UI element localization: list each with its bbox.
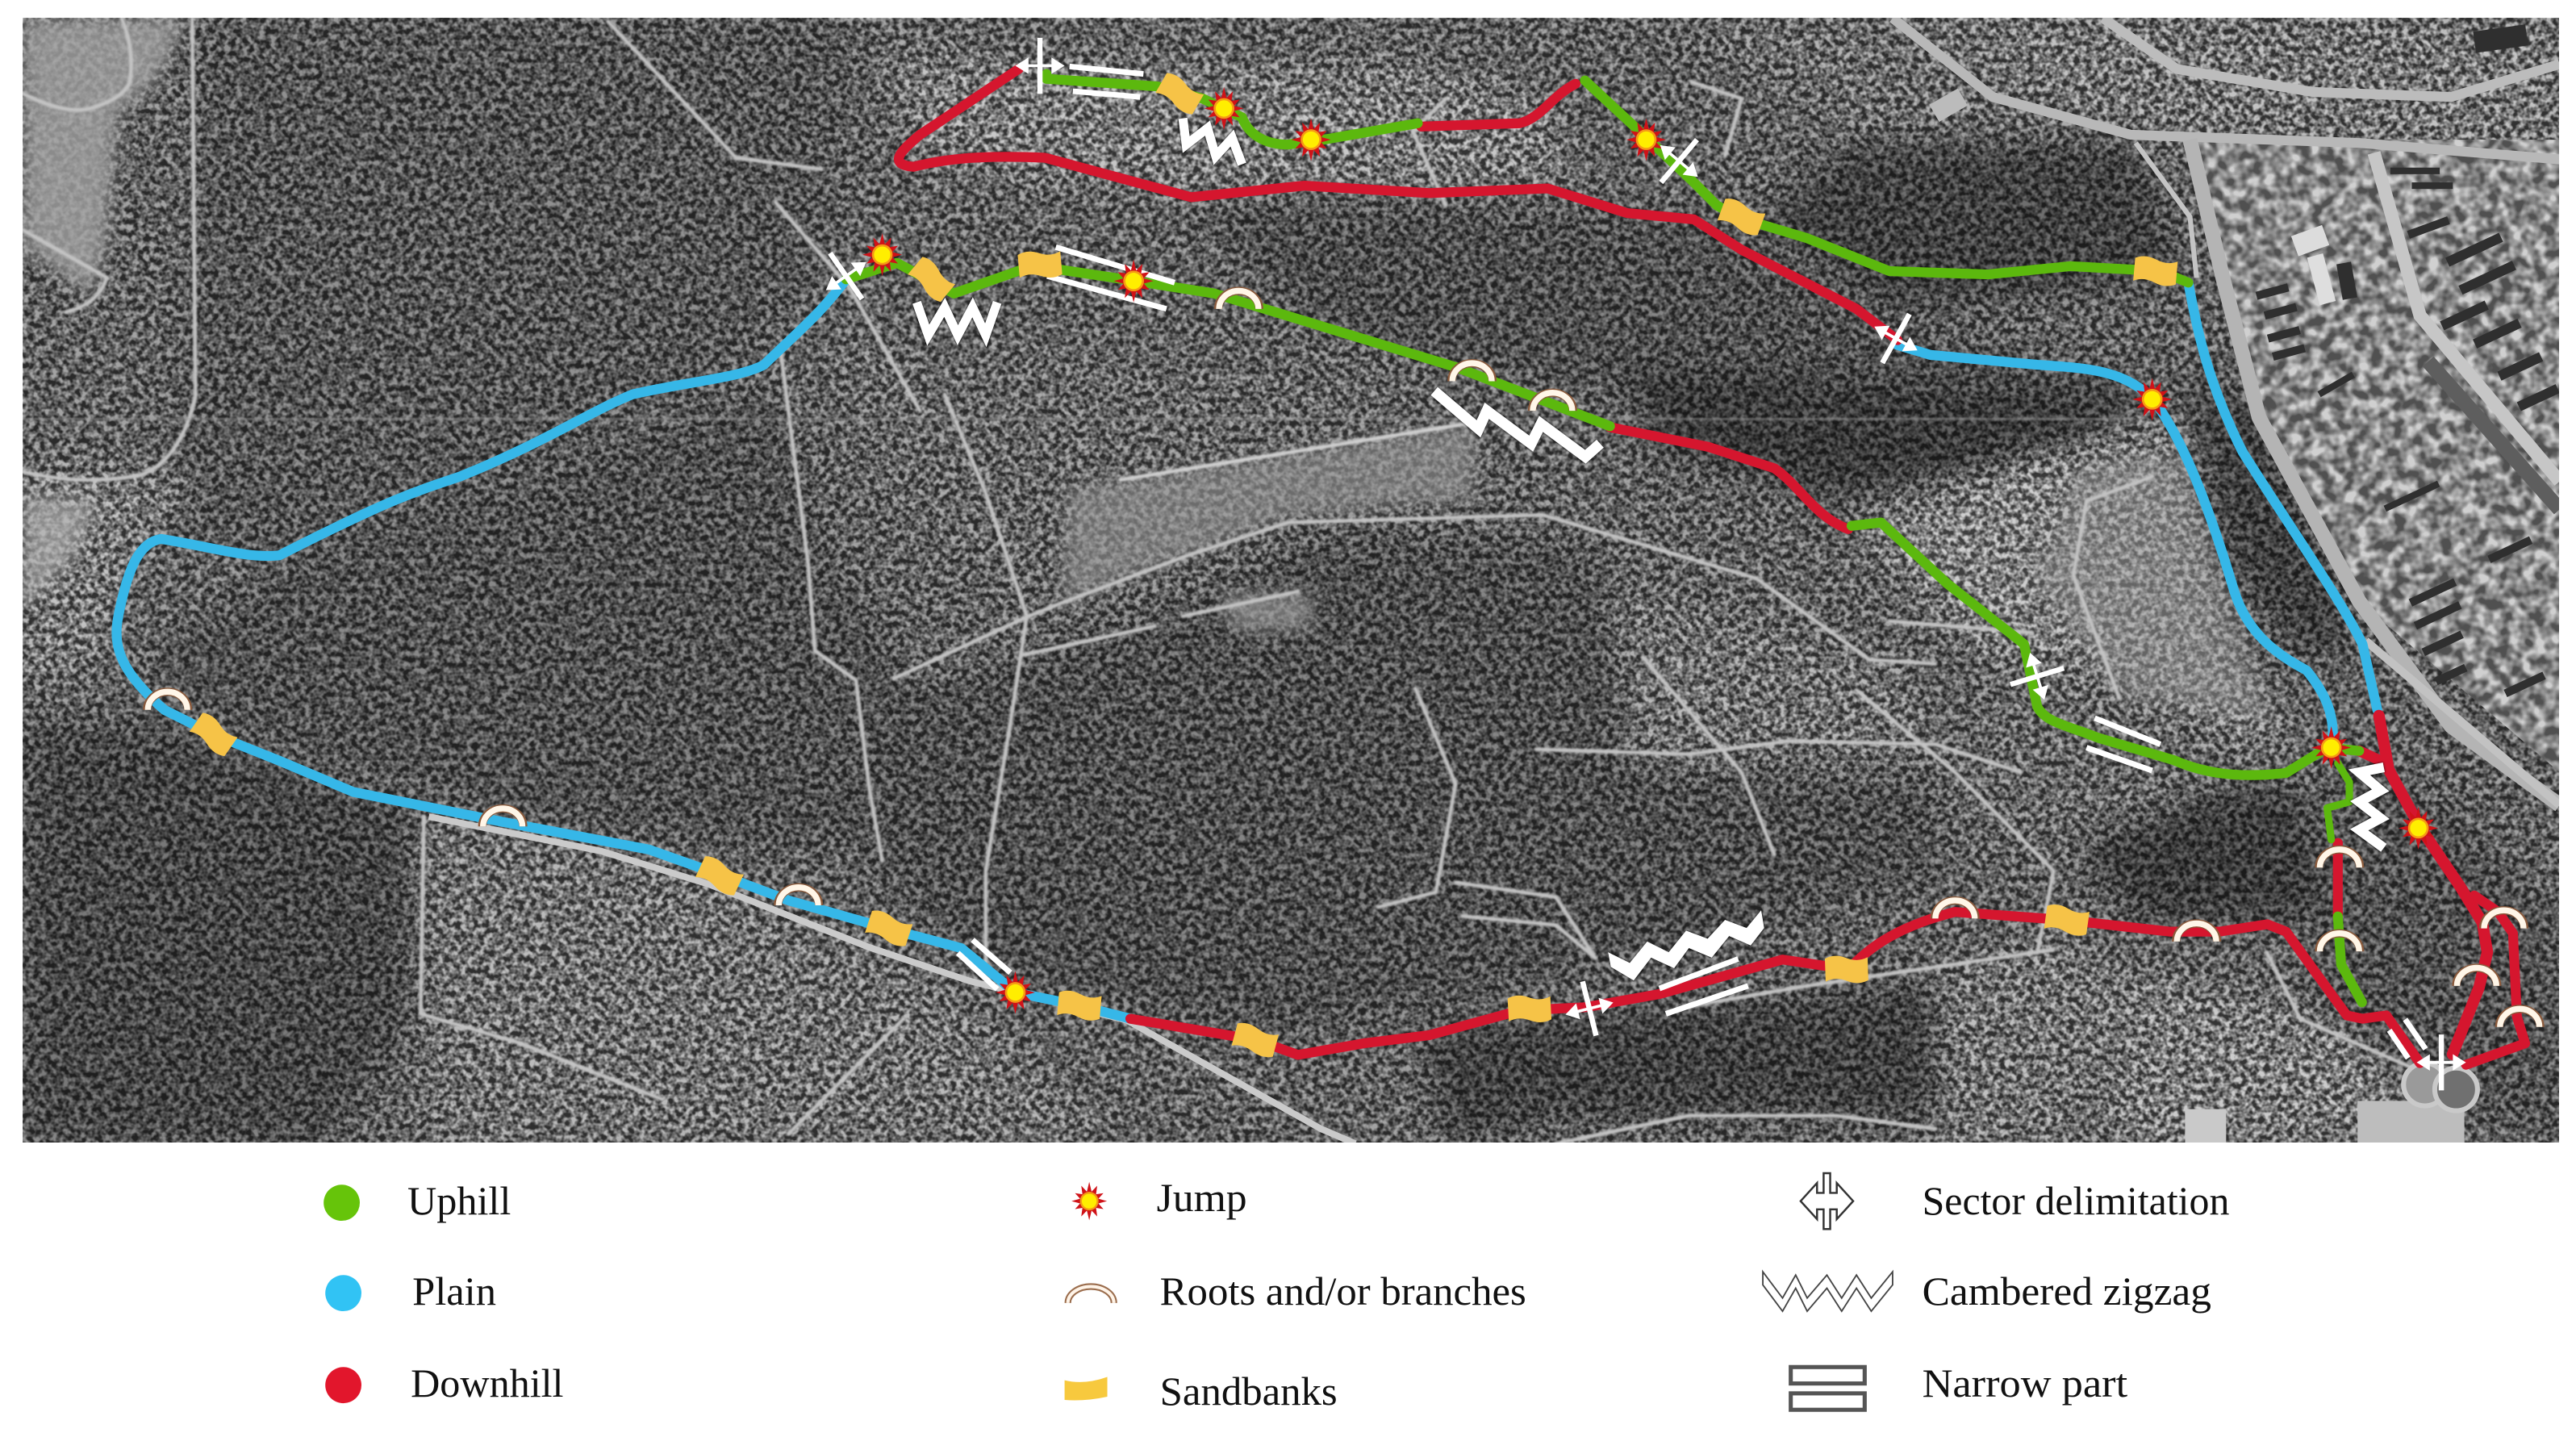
tree texture — [23, 18, 2559, 1143]
aerial photo tonal background — [23, 16, 2560, 1143]
legend item: narrow part: Narrow part — [1923, 1361, 2127, 1406]
open clearings — [23, 18, 2275, 723]
roots and branches markers — [147, 290, 2541, 1027]
sector delimitation markers — [810, 38, 2466, 1090]
panel: aerial map — [23, 16, 2560, 1143]
legend item: uphill: Uphill — [407, 1179, 511, 1223]
cambered zigzag markers on route — [916, 119, 2384, 980]
legend item: jump: Jump — [1157, 1176, 1247, 1220]
legend item: plain — [325, 1269, 496, 1314]
route: downhill sections — [899, 69, 2525, 1065]
sandbank markers — [188, 71, 2178, 1059]
highways and city — [1893, 18, 2560, 805]
legend item: plain: Plain — [412, 1269, 496, 1314]
legend item: roots and branches: Roots and/or branches — [1160, 1269, 1526, 1314]
route: plain sections — [116, 279, 2378, 1019]
legend item: downhill: Downhill — [411, 1361, 563, 1406]
route: uphill sections — [846, 74, 2362, 1002]
legend item: downhill — [325, 1361, 563, 1406]
legend — [324, 1173, 2229, 1414]
legend item: sandbanks: Sandbanks — [1160, 1369, 1338, 1414]
legend item: cambered zigzag: Cambered zigzag — [1923, 1269, 2211, 1314]
legend item: narrow part — [1791, 1361, 2127, 1410]
legend item: sector delimitation: Sector delimitation — [1923, 1179, 2229, 1223]
legend item: cambered zigzag — [1763, 1269, 2211, 1314]
jump markers — [862, 87, 2438, 1013]
narrow part markers on route — [958, 66, 2426, 1058]
legend item: sector delimitation — [1801, 1173, 2229, 1229]
legend item: sandbanks — [1065, 1369, 1338, 1414]
tracks and roads — [23, 18, 2432, 1143]
legend item: jump — [1071, 1176, 1247, 1220]
sports ground — [2185, 1063, 2478, 1143]
legend item: uphill — [324, 1179, 511, 1223]
